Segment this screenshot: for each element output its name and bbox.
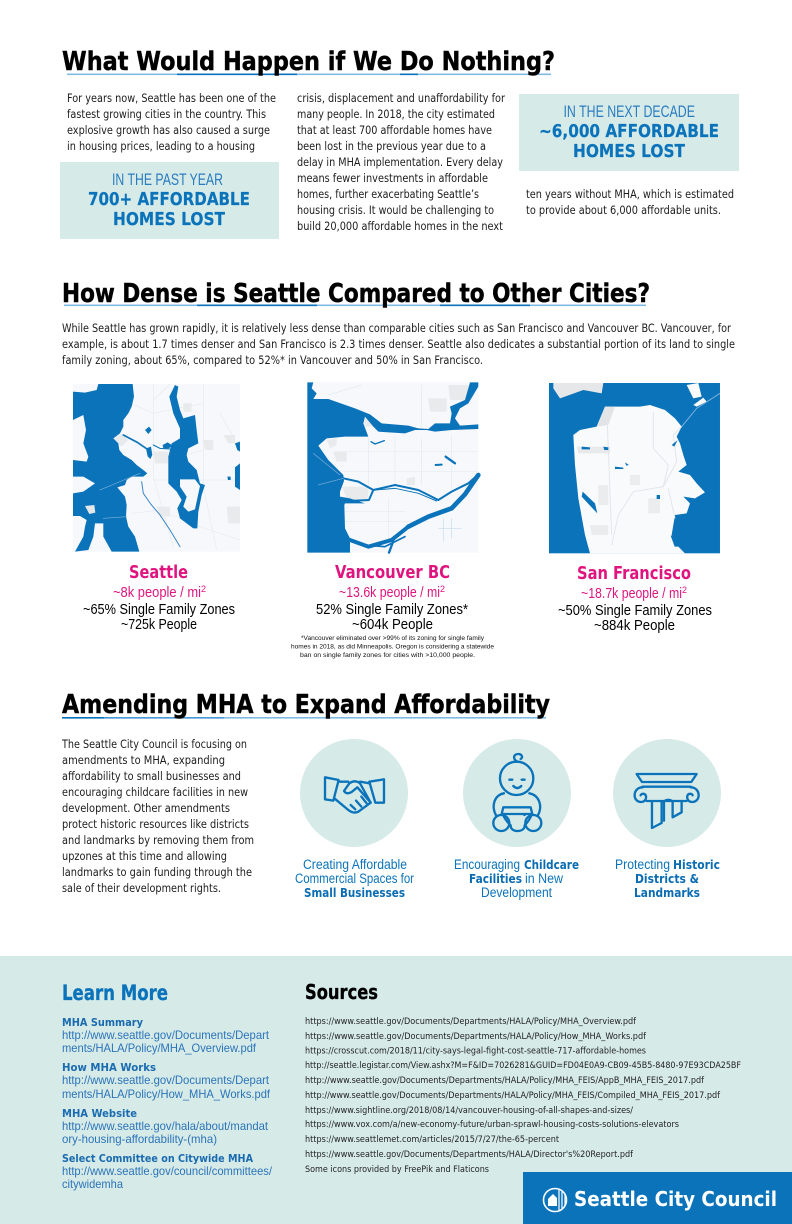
text block: intro column 2: that at least 700 affordable homes have xyxy=(297,124,492,137)
source list: https://www.seattlemet.com/articles/2015/7/27/the-65-percent xyxy=(305,1134,559,1145)
source list: http://www.seattle.gov/Documents/Departments/HALA/Policy/MHA_FEIS/Compiled_MHA_FEIS_2017.pdf xyxy=(305,1090,721,1101)
callout: past year: 700+ AFFORDABLE xyxy=(88,189,250,210)
stats: Seattle: ~8k people / mi xyxy=(113,585,201,601)
source list xyxy=(305,1016,741,1175)
icon: baby xyxy=(463,739,571,847)
caption: historic districts: Protecting xyxy=(615,857,670,872)
text block: amendments: protect historic resources like districts xyxy=(62,818,249,831)
stats: Seattle: 2 xyxy=(201,584,206,594)
heading: What Would Happen if We Do Nothing?: What Would Happen if We Do Nothing? xyxy=(62,47,555,77)
text block: density comparison: family zoning, about 65%, compared to 52%* in Vancouver and 50% in San Francisco. xyxy=(62,354,483,367)
stats: San Francisco xyxy=(558,563,712,634)
stats: San Francisco: San Francisco xyxy=(577,563,691,584)
icon: historic column xyxy=(613,739,721,847)
callout: past year: HOMES LOST xyxy=(113,209,226,230)
source list: https://www.sightline.org/2018/08/14/vancouver-housing-of-all-shapes-and-sizes/ xyxy=(305,1105,634,1116)
callout: past year: IN THE PAST YEAR xyxy=(112,171,223,189)
link list: Learn More xyxy=(62,1016,273,1191)
footnote: Vancouver zoning: *Vancouver eliminated over >99% of its zoning for single family xyxy=(301,635,485,642)
text block: amendments: development. Other amendments xyxy=(62,802,230,815)
footnote: Vancouver zoning: homes in 2018, as did Minneapolis. Oregon is considering a statewide xyxy=(291,644,494,650)
stats: Seattle: ~725k People xyxy=(121,617,197,633)
caption: childcare: Development xyxy=(481,885,552,900)
caption: small businesses: Small Businesses xyxy=(304,885,405,900)
text block: amendments xyxy=(61,738,254,895)
caption: historic districts: Landmarks xyxy=(634,885,700,900)
caption: childcare: Childcare xyxy=(524,857,579,872)
link list: Learn More: MHA Website xyxy=(62,1107,137,1120)
footnote: Vancouver zoning: ban on single family zones for cities with >10,000 people. xyxy=(300,652,475,659)
stats: Vancouver BC: ~13.6k people / mi xyxy=(339,585,440,601)
link list: Learn More: ory-housing-affordability-(mha) xyxy=(62,1132,217,1146)
text block: amendments: sale of their development rights. xyxy=(62,882,221,895)
text block: intro column 2: build 20,000 affordable homes in the next xyxy=(297,220,503,233)
link list: Learn More: http://www.seattle.gov/council/committees/ xyxy=(62,1164,273,1178)
stats: Vancouver BC: 52% Single Family Zones* xyxy=(316,602,468,618)
text block: intro column 2 xyxy=(297,92,505,233)
heading: Learn More: Learn More xyxy=(62,981,168,1005)
heading: Sources: Sources xyxy=(305,980,378,1004)
caption: childcare: in New xyxy=(525,871,563,886)
source list: https://www.vox.com/a/new-economy-future/urban-sprawl-housing-costs-solutions-elevators xyxy=(305,1119,679,1130)
stats: Seattle xyxy=(83,562,235,633)
source list: Some icons provided by FreePik and Flaticons xyxy=(305,1164,489,1175)
caption: childcare xyxy=(454,857,579,900)
callout: next decade xyxy=(519,94,739,171)
stats: Seattle: Seattle xyxy=(129,562,188,583)
stats: San Francisco: ~884k People xyxy=(594,618,675,634)
callout: next decade: ~6,000 AFFORDABLE xyxy=(539,121,719,142)
stats: San Francisco: ~50% Single Family Zones xyxy=(558,603,712,619)
link list: Learn More: MHA Summary xyxy=(62,1016,143,1029)
stats: Vancouver BC: Vancouver BC xyxy=(335,562,450,583)
source list: https://www.seattle.gov/Documents/Departments/HALA/Policy/MHA_Overview.pdf xyxy=(305,1016,637,1027)
link list: Learn More: citywidemha xyxy=(62,1177,123,1191)
link list: Learn More: http://www.seattle.gov/Documents/Depart xyxy=(62,1028,270,1042)
text block: intro column 3: ten years without MHA, which is estimated xyxy=(526,188,734,201)
text block: amendments: The Seattle City Council is focusing on xyxy=(61,738,247,751)
heading: Amending MHA to Expand Affordability: Amending MHA to Expand Affordability xyxy=(62,690,550,720)
text block: intro column 2: means fewer investments in affordable xyxy=(297,172,488,185)
text block: amendments: upzones at this time and allowing xyxy=(62,850,227,863)
icon: handshake xyxy=(300,739,408,847)
link list: Learn More: http://www.seattle.gov/hala/about/mandat xyxy=(62,1119,269,1133)
heading: How Dense is Seattle Compared to Other Cities?: How Dense is Seattle Compared to Other Cities? xyxy=(62,279,650,309)
source list: http://www.seattle.gov/Documents/Departments/HALA/Policy/MHA_FEIS/AppB_MHA_FEIS_2017.pdf xyxy=(305,1075,705,1086)
logo banner: Seattle City Council xyxy=(523,1172,792,1224)
text block: amendments: amendments to MHA, expanding xyxy=(62,754,225,767)
text block: intro column 2: been lost in the previous year due to a xyxy=(297,140,486,153)
text block: intro column 2: delay in MHA implementation. Every delay xyxy=(297,156,503,169)
callout: next decade: IN THE NEXT DECADE xyxy=(564,103,695,121)
text block: amendments: landmarks to gain funding through the xyxy=(62,866,252,879)
text block: intro column 1 xyxy=(67,92,276,153)
text block: amendments: affordability to small businesses and xyxy=(62,770,241,783)
stats: Seattle: ~65% Single Family Zones xyxy=(83,602,235,618)
caption: historic districts: Historic xyxy=(673,857,720,872)
text block: intro column 1: in housing prices, leading to a housing xyxy=(67,140,255,153)
callout: past year xyxy=(60,162,279,239)
source list: https://crosscut.com/2018/11/city-says-legal-fight-cost-seattle-717-affordable-homes xyxy=(305,1046,646,1056)
stats: Vancouver BC xyxy=(316,562,468,633)
map: San Francisco xyxy=(549,383,720,553)
map: Seattle xyxy=(73,384,240,552)
text block: intro column 2: many people. In 2018, the city estimated xyxy=(297,108,495,121)
text block: amendments: encouraging childcare facilities in new xyxy=(62,786,248,799)
stats: San Francisco: ~18.7k people / mi xyxy=(581,586,682,602)
link list: Learn More: Select Committee on Citywide MHA xyxy=(62,1152,253,1165)
caption: historic districts xyxy=(615,857,720,900)
text block: intro column 2: housing crisis. It would be challenging to xyxy=(297,204,494,217)
panel: footer xyxy=(0,956,792,1224)
caption: small businesses xyxy=(295,857,414,900)
text block: intro column 2: homes, further exacerbating Seattle’s xyxy=(297,188,479,201)
stats: Vancouver BC: 2 xyxy=(440,584,445,594)
source list: https://www.seattle.gov/Documents/Departments/HALA/Policy/How_MHA_Works.pdf xyxy=(305,1031,647,1042)
text block: intro column 2: crisis, displacement and unaffordability for xyxy=(297,92,505,105)
text block: intro column 3 xyxy=(526,188,734,217)
link list: Learn More: http://www.seattle.gov/Documents/Depart xyxy=(62,1073,270,1087)
callout: next decade: HOMES LOST xyxy=(573,141,686,162)
stats: San Francisco: 2 xyxy=(682,585,687,595)
logo banner: Seattle City Council: Seattle City Council xyxy=(574,1187,777,1211)
text block: density comparison xyxy=(62,322,735,367)
footnote: Vancouver zoning xyxy=(291,635,494,659)
caption: childcare: Encouraging xyxy=(454,857,520,872)
source list: http://seattle.legistar.com/View.ashx?M=F&ID=7026281&GUID=FD04E0A9-CB09-45B5-8480-97E93CDA25BF xyxy=(305,1060,741,1071)
caption: historic districts: Districts & xyxy=(635,871,699,886)
text block: intro column 1: explosive growth has also caused a surge xyxy=(67,124,270,137)
caption: childcare: Facilities xyxy=(469,871,522,886)
caption: small businesses: Creating Affordable xyxy=(303,857,407,872)
caption: small businesses: Commercial Spaces for xyxy=(295,871,414,886)
link list: Learn More: ments/HALA/Policy/MHA_Overview.pdf xyxy=(62,1041,257,1055)
text block: amendments: and landmarks by removing them from xyxy=(62,834,254,847)
text block: intro column 1: For years now, Seattle has been one of the xyxy=(67,92,276,105)
link list: Learn More: How MHA Works xyxy=(62,1061,156,1074)
stats: Vancouver BC: ~604k People xyxy=(352,617,433,633)
text block: intro column 1: fastest growing cities in the country. This xyxy=(67,108,266,121)
source list: https://www.seattle.gov/Documents/Departments/HALA/Director's%20Report.pdf xyxy=(305,1149,634,1160)
text block: intro column 3: to provide about 6,000 affordable units. xyxy=(526,204,721,217)
link list: Learn More: ments/HALA/Policy/How_MHA_Works.pdf xyxy=(62,1087,271,1101)
map: Vancouver xyxy=(307,382,478,553)
icon: city seal xyxy=(544,1188,566,1212)
